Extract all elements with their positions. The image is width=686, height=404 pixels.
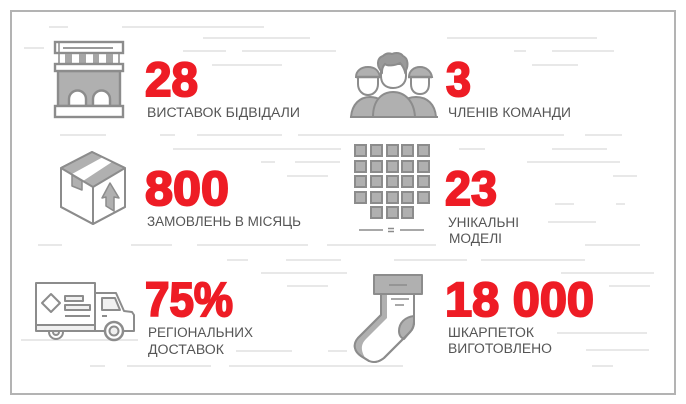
label: regional deliveries: ДОСТАВОК (148, 342, 224, 357)
label: regional deliveries: РЕГІОНАЛЬНИХ (148, 325, 253, 340)
stat: 18 000: 18 000 (445, 274, 594, 327)
stat: 800: 800 (145, 163, 229, 216)
label: orders per month: ЗАМОВЛЕНЬ В МІСЯЦЬ (147, 214, 301, 229)
label: unique models: МОДЕЛІ (449, 231, 502, 246)
icon: delivery truck (36, 283, 134, 340)
stat: 75%: 75% (145, 274, 233, 327)
label: regional deliveries (148, 325, 253, 357)
icon: parcel box (61, 152, 125, 224)
icon: team of three (350, 53, 438, 117)
stat: 28: 28 (145, 54, 198, 107)
label: socks produced: ШКАРПЕТОК (448, 325, 534, 340)
label: unique models: УНІКАЛЬНІ (448, 215, 519, 230)
stat: 3: 3 (446, 54, 471, 107)
stat: 23: 23 (445, 163, 497, 216)
label: exhibitions visited: ВИСТАВОК БІДВІДАЛИ (147, 105, 300, 120)
label: unique models (448, 215, 519, 246)
label: socks produced: ВИГОТОВЛЕНО (448, 341, 552, 356)
label: socks produced (448, 325, 552, 356)
icon: sock models grid (355, 145, 429, 232)
icon: sock (355, 275, 422, 362)
label: team members: ЧЛЕНІВ КОМАНДИ (448, 105, 571, 120)
icon: museum building (55, 42, 123, 117)
